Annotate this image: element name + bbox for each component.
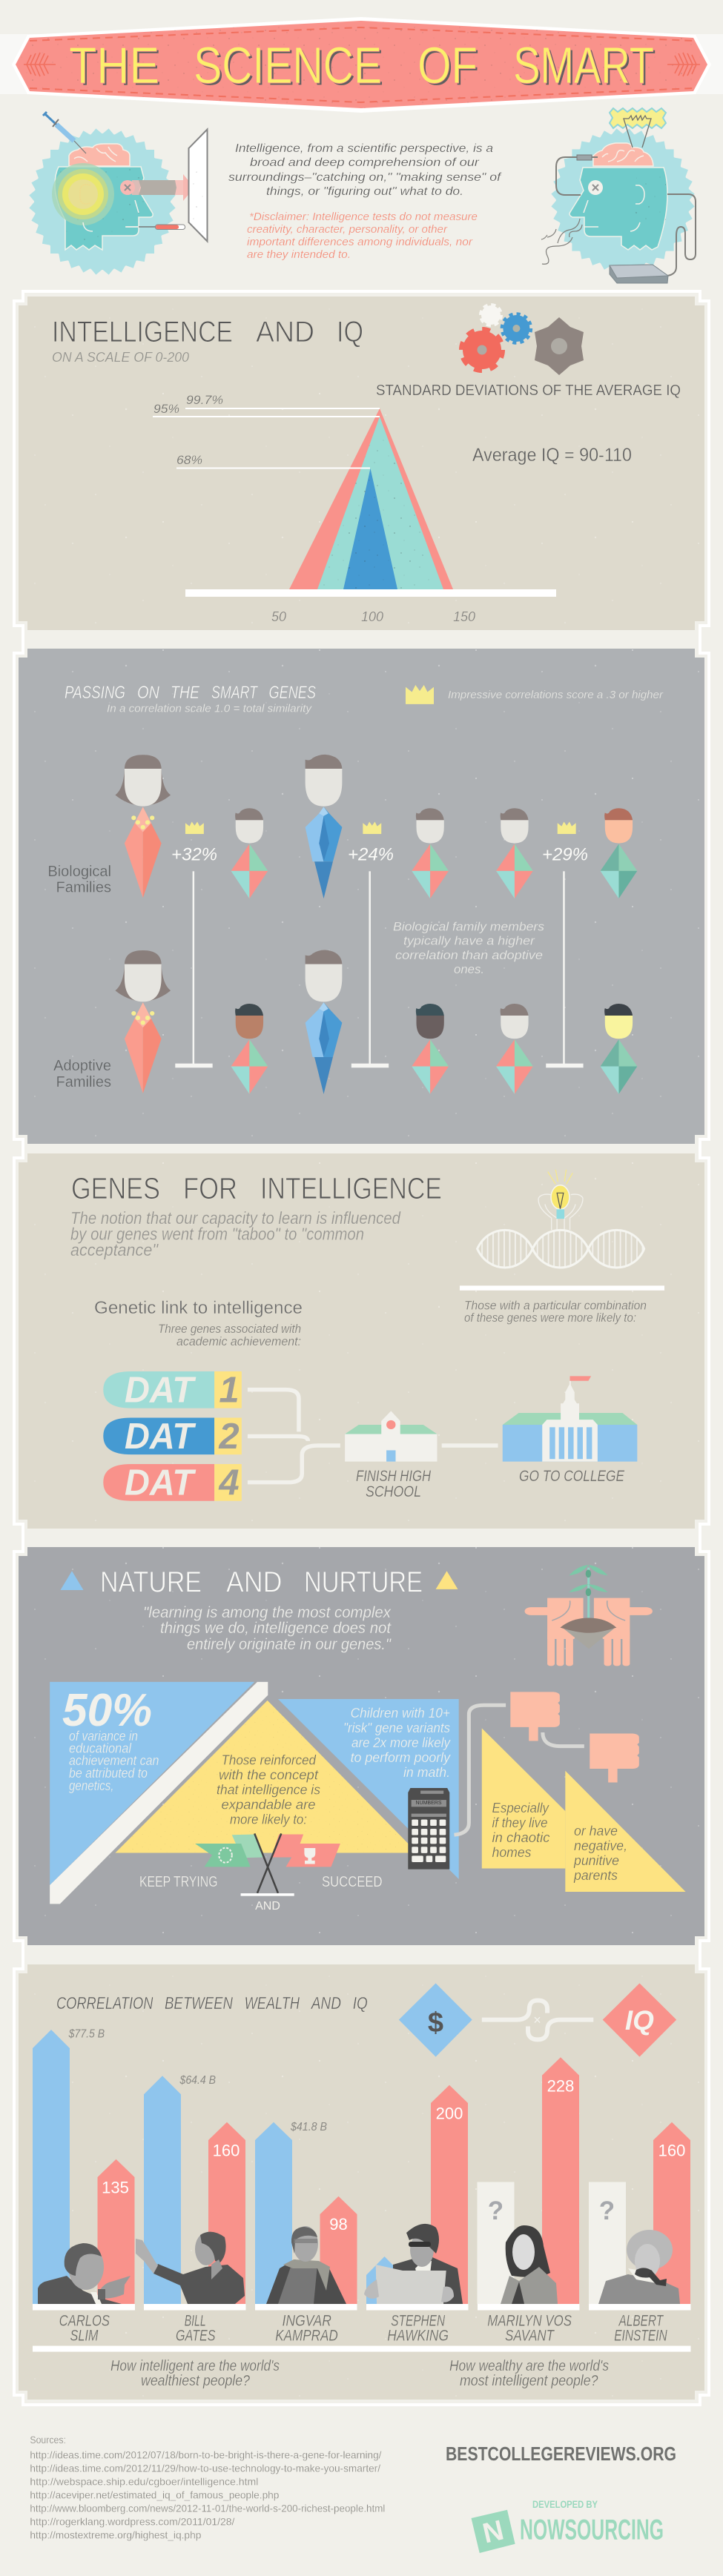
subheading: In a correlation scale 1.0 = total similarity [107,703,312,715]
illustration: left head under test [29,112,208,275]
family figures [115,755,637,1094]
note: particular combination: Those with a particular combination [464,1299,647,1312]
syringe [43,112,86,153]
names: SLIM [70,2328,99,2345]
title shadow: THE [71,39,162,96]
quote: "learning is among the most complex [143,1604,392,1621]
text: chaotic homes [492,1800,550,1860]
divider bar [460,1285,664,1291]
adoptive mother [115,950,171,1093]
bar: Bill Gates wealth [144,2076,181,2304]
heading: INTELLIGENCE [260,1171,442,1205]
developer logo [472,2499,664,2553]
names [59,2313,667,2345]
IQ values: 98 [329,2215,348,2234]
bar: Stephen Hawking wealth [366,2257,403,2304]
title shadow [71,39,656,96]
percent values: +24% [348,845,394,864]
label: finish high school: SCHOOL [366,1483,421,1500]
bar: Stephen Hawking IQ [431,2085,468,2304]
percent values: +32% [171,845,217,864]
axis labels: 100 [361,609,383,624]
heading: SMART [211,683,259,703]
text: risk gene variants: "risk" gene variants [343,1720,450,1735]
sources list [30,2434,385,2541]
title shadow: SCIENCE [196,39,384,96]
heading: NATURE [100,1566,202,1598]
IQ values: 135 [102,2178,129,2196]
heading: WEALTH [245,1993,300,2013]
heading [52,316,363,348]
text: risk gene variants: to perform poorly [351,1749,452,1765]
crown 1 [185,822,204,834]
thermometer [126,225,185,230]
disclaimer text: *Disclaimer: Intelligence tests do not measure [249,211,478,223]
row labels: Families [56,1074,111,1090]
note: three genes [158,1322,301,1348]
heading [56,1993,368,2013]
family note: ones. [454,962,484,976]
disclaimer text: creativity, character, personality, or other [247,224,448,236]
gene pill: DAT 2 [103,1417,242,1454]
names: SAVANT [505,2328,555,2345]
stat: 50 percent: 50% [62,1685,152,1736]
unknown wealth marks: ? [488,2196,504,2225]
axis labels: 150 [453,609,475,624]
title banner [12,17,711,113]
text: chaotic homes: if they live [492,1815,547,1830]
quote [143,1604,392,1653]
bar: Bill Gates IQ [208,2122,245,2304]
percent values [171,845,588,864]
correlation connector 2 [351,871,389,1067]
title text [69,36,654,94]
unknown wealth marks [488,2196,615,2225]
note: three genes: academic achievement: [176,1334,301,1348]
heading: ON [137,683,160,703]
names: BILL [185,2313,206,2330]
text: reinforced concept: more likely to: [230,1812,307,1827]
gene pill: DAT 4 [103,1464,242,1501]
icon: high school [345,1411,437,1462]
stat description [69,1729,159,1793]
axis labels: 50 [271,609,286,624]
IQ values: 160 [658,2141,685,2160]
label: standard deviations: STANDARD DEVIATIONS OF THE AVERAGE IQ [376,383,681,399]
text: punitive parents: negative, [574,1838,627,1853]
wealth values: $41.8 B [290,2121,327,2133]
text: chaotic homes: Especially [492,1800,550,1815]
IQ diamond [603,1983,676,2057]
question: wealthiest: wealthiest people? [141,2373,251,2389]
names: MARILYN VOS [487,2313,572,2330]
dollar diamond [399,1983,472,2057]
text: punitive parents [573,1823,627,1883]
panel: intelligence and IQ [19,297,704,630]
stat description: achievement can [69,1753,159,1768]
intro text: broad and deep comprehension of our [250,156,480,169]
developer logo: N [480,2514,506,2550]
bar: Ingvar Kamprad wealth [255,2122,292,2304]
heading triangle blue [60,1571,84,1590]
chart labels: 99.7% [186,393,223,407]
text: reinforced concept: that intelligence is [217,1782,320,1798]
electric chip [610,108,666,148]
stat description: be attributed to [69,1766,148,1781]
heading [71,1171,442,1205]
label: and: AND [255,1900,280,1913]
publisher name: BESTCOLLEGEREVIEWS.ORG [446,2443,676,2465]
family note: Biological family members [393,919,545,934]
calculator label: NUMBERS [415,1801,442,1806]
sources list: http://webspace.ship.edu/cgboer/intelligence.html [30,2476,258,2488]
developer logo: DEVELOPED BY [532,2499,598,2510]
heading: NURTURE [304,1566,423,1598]
portrait: Bill Gates [136,2232,245,2304]
heading: IQ [353,1993,368,2013]
title text: OF [417,36,478,94]
names: INGVAR [282,2313,331,2330]
text: chaotic homes: homes [492,1844,531,1860]
question: wealthiest: How intelligent are the world's [110,2358,280,2374]
note: three genes: Three genes associated with [158,1322,301,1336]
row labels [47,864,111,1090]
row labels: Families [56,879,111,895]
percent values: +29% [542,845,588,864]
heading: GENES [268,683,316,703]
heading: AND [256,316,314,348]
text: risk gene variants: are 2x more likely [351,1735,452,1750]
bar: Marilyn vos Savant IQ [542,2057,579,2304]
intro paragraph: by our genes went from "taboo" to "common [70,1225,364,1244]
sources list: http://www.bloomberg.com/news/2012-11-01/the-world-s-200-richest-people.html [30,2503,385,2514]
heading: PASSING [65,683,125,703]
connector between diamonds [482,2001,593,2039]
question: most intelligent: How wealthy are the world's [449,2358,609,2374]
text: risk gene variants [343,1705,452,1780]
text: chaotic homes: in chaotic [492,1830,550,1845]
gene pill: DAT 1 [103,1371,242,1408]
DAT numbers: 1 [219,1370,240,1410]
wealth values: $64.4 B [179,2074,216,2087]
blue triangle: math [278,1699,459,1879]
correlation connector 1 [175,871,213,1067]
title text: SCIENCE [194,36,382,94]
text: reinforced concept: expandable are [221,1797,316,1812]
DAT labels [125,1370,197,1503]
portrait: Ingvar Kamprad [266,2226,346,2304]
panel: passing on the smart genes [19,649,704,1144]
label: finish high school: FINISH HIGH [356,1468,432,1485]
names: KAMPRAD [275,2328,338,2345]
yellow triangle: punitive parents [565,1771,686,1892]
crossed flags [195,1833,340,1896]
DAT labels: DAT [125,1370,197,1410]
intro text: things, or "figuring out" what to do. [266,185,463,198]
question: most intelligent: most intelligent people? [460,2373,598,2389]
portrait: Marilyn vos Savant [501,2225,558,2304]
heading: FOR [183,1171,237,1205]
portrait: Albert Einstein [598,2230,680,2304]
DAT numbers [218,1370,240,1503]
title shadow: OF [420,39,480,96]
IQ values: 228 [547,2077,574,2096]
heading triangle yellow [436,1571,458,1589]
heading: CORRELATION [56,1993,153,2013]
connectors [248,1390,498,1483]
chart: bell triangles [153,408,556,597]
heading [65,683,316,703]
bar: Carlos Slim wealth [33,2030,70,2304]
title text: THE [69,36,159,94]
intro text [228,142,502,198]
sources list: Sources: [30,2434,66,2446]
panel: correlation between wealth and IQ [19,1964,704,2400]
biological father [306,755,342,898]
label: keep trying: KEEP TRYING [139,1874,218,1890]
intro paragraph: acceptance" [70,1240,159,1259]
disclaimer text: important differences among individuals, nor [247,236,473,248]
family note: correlation than adoptive [395,948,543,962]
icon: light bulb above DNA [538,1170,583,1230]
bar: Albert Einstein IQ [653,2122,690,2304]
white diagonal band [50,1682,268,1904]
section frame outline [14,291,709,2405]
family note: typically have a higher [403,934,535,948]
biological parent 3 [496,808,533,898]
biological child 1 [231,808,268,898]
heading: BETWEEN [165,1993,233,2013]
title text: SMART [513,36,654,94]
IQ values [102,2077,685,2234]
sources list: http://rogerklang.wordpress.com/2011/01/28/ [30,2516,235,2528]
text: reinforced concept: Those reinforced [221,1752,317,1768]
yellow triangle: chaotic homes [482,1728,565,1869]
label: succeed: SUCCEED [322,1874,383,1890]
DAT numbers: 2 [218,1417,240,1457]
DAT labels: DAT [125,1417,197,1457]
cables [541,157,696,276]
yellow triangle: reinforced [115,1701,417,1852]
dollar symbol: $ [428,2007,443,2039]
heading: GENES [71,1171,160,1205]
disclaimer text: are they intended to. [247,249,351,261]
baseline bars [33,2304,691,2351]
names: CARLOS [59,2313,110,2330]
question: most intelligent [449,2358,609,2389]
note: particular combination: of these genes were more likely to: [464,1311,636,1325]
IQ values: 160 [213,2141,240,2160]
sources list: http://aceviper.net/estimated_iq_of_famous_people.php [30,2489,280,2501]
portrait: Stephen Hawking [364,2224,463,2304]
icon: hands holding seedling [525,1565,653,1666]
intro text: surroundings–"catching on," "making sense" of [228,171,502,184]
IQ values: 200 [436,2104,463,2123]
wealth values [68,2028,327,2133]
icon: calculator [408,1788,449,1870]
crown 2 [363,822,381,834]
stat description: of variance in [69,1729,138,1744]
names: HAWKING [387,2328,449,2345]
axis labels [271,609,475,624]
panel: nature and nurture [19,1547,704,1945]
DAT labels: DAT [125,1463,197,1503]
left arrow feather ornament [24,53,56,76]
icon: thumbs down 1 [510,1692,560,1741]
biological child 3 [601,808,637,898]
quote: entirely originate in our genes." [187,1636,392,1653]
tablet device [610,265,668,283]
biological child 2 [412,808,449,898]
intro paragraph [70,1208,401,1259]
chart labels: 68% [176,453,202,467]
chart labels: 95% [153,402,179,416]
text: risk gene variants: Children with 10+ [351,1705,450,1721]
stat description: genetics, [69,1778,114,1793]
correlation connector 3 [546,871,584,1067]
heading [100,1566,423,1598]
heading: INTELLIGENCE [52,316,233,348]
bar: Marilyn vos Savant wealth unknown [478,2182,515,2304]
sources list: http://ideas.time.com/2012/07/18/born-to-be-bright-is-there-a-gene-for-learning/ [30,2449,381,2461]
icon: DNA double helix [478,1230,644,1268]
intro text: Intelligence, from a scientific perspective, is a [235,142,493,155]
unknown wealth marks: ? [599,2196,615,2225]
title shadow: SMART [515,39,656,96]
note: particular combination [464,1299,647,1325]
stat description: educational [69,1741,132,1755]
screen [188,129,208,242]
panel: genes for intelligence [19,1153,704,1529]
adoptive father [306,950,342,1094]
question: wealthiest [110,2358,280,2389]
adoptive parent 3 [496,1004,533,1094]
heading: AND [310,1993,341,2013]
DAT numbers: 4 [218,1463,240,1503]
text: reinforced concept [217,1752,320,1827]
crown legend [406,685,664,704]
text: punitive parents: or have [574,1823,618,1838]
chart labels [153,393,223,467]
crown legend: Impressive correlations score a .3 or higher [448,689,664,701]
heading: IQ [337,316,363,348]
portrait: Carlos Slim [38,2243,131,2305]
text: punitive parents: parents [573,1867,618,1883]
heading: AND [226,1566,282,1598]
family note [393,919,545,976]
icon: college [503,1376,637,1462]
row labels: Biological [47,864,111,880]
icon: gears [461,305,584,375]
multiply sign: × [533,2013,541,2027]
crown 3 [558,822,576,834]
text: risk gene variants: in math. [403,1764,450,1780]
bar: Albert Einstein wealth unknown [589,2182,626,2304]
names: EINSTEIN [614,2328,667,2345]
connector to thumbs [454,1705,584,1835]
adoptive child 1 [231,1004,268,1094]
names: GATES [176,2328,215,2345]
biological mother [115,755,171,898]
right arrow feather ornament [667,53,700,76]
wealth values: $77.5 B [68,2028,105,2040]
bar: Carlos Slim IQ [98,2159,135,2304]
row labels: Adoptive [53,1058,111,1074]
sources list: http://ideas.time.com/2012/11/29/how-to-use-technology-to-make-you-smarter/ [30,2463,380,2474]
quote: things we do, intelligence does not [160,1620,392,1637]
IQ symbol: IQ [625,2005,654,2036]
illustration: right head wired up [541,108,696,283]
average IQ note: Average IQ = 90-110 [472,445,632,466]
subheading: genetic link: Genetic link to intelligence [94,1298,303,1318]
subheading: ON A SCALE OF 0-200 [52,350,189,365]
bar: Ingvar Kamprad IQ [320,2196,357,2304]
intro paragraph: The notion that our capacity to learn is influenced [70,1208,401,1228]
blue triangle: 50 percent [50,1682,254,1885]
adoptive child 2 [412,1004,449,1094]
text: reinforced concept: with the concept [219,1767,319,1783]
heading: THE [171,683,200,703]
text: punitive parents: punitive [573,1852,619,1868]
names: ALBERT [618,2313,664,2330]
label: go to college: GO TO COLLEGE [519,1468,625,1485]
icon: thumbs down 2 [590,1733,639,1783]
label: finish high school [356,1468,432,1500]
adoptive child 3 [601,1004,637,1094]
names: STEPHEN [391,2313,446,2330]
disclaimer text [247,211,478,261]
sources list: http://mostextreme.org/highest_iq.php [30,2529,202,2541]
